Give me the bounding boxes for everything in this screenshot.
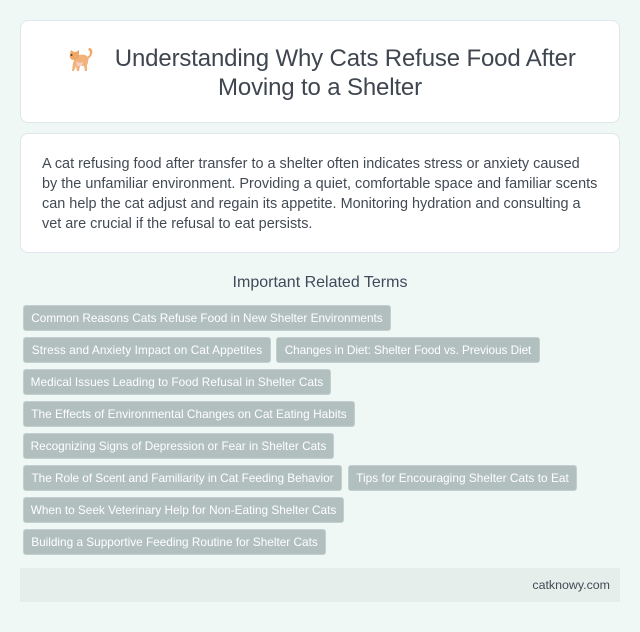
- icon: cat: [70, 48, 92, 71]
- tag: The Effects of Environmental Changes on Cat Eating Habits: [31, 407, 347, 421]
- tag: [23, 401, 355, 427]
- title text: Moving to a Shelter: [218, 74, 422, 101]
- tag: [23, 433, 334, 459]
- tag: When to Seek Veterinary Help for Non-Eating Shelter Cats: [31, 503, 336, 517]
- tag: [23, 529, 326, 555]
- tag: The Role of Scent and Familiarity in Cat Feeding Behavior: [32, 471, 333, 485]
- tag: [23, 465, 342, 491]
- summary text: can help the cat adjust and regain its appetite. Monitoring hydration and consulting a: [42, 196, 581, 212]
- heading: related terms: Important Related Terms: [233, 274, 407, 291]
- tag: Tips for Encouraging Shelter Cats to Eat: [356, 471, 569, 485]
- summary text: vet are crucial if the refusal to eat persists.: [42, 216, 312, 232]
- tag: [23, 305, 391, 331]
- title text: Understanding Why Cats Refuse Food After: [115, 45, 576, 72]
- tag: Changes in Diet: Shelter Food vs. Previous Diet: [285, 343, 531, 357]
- tag: Building a Supportive Feeding Routine for Shelter Cats: [31, 535, 318, 549]
- tag: [348, 465, 577, 491]
- panel: summary: [20, 133, 620, 253]
- tag: Medical Issues Leading to Food Refusal in Shelter Cats: [31, 375, 323, 389]
- tag: Common Reasons Cats Refuse Food in New Shelter Environments: [31, 311, 383, 325]
- title text: [115, 45, 576, 101]
- summary text: A cat refusing food after transfer to a shelter often indicates stress or anxiety caused: [42, 156, 580, 172]
- summary text: by the unfamiliar environment. Providing a quiet, comfortable space and familiar scents: [42, 176, 597, 192]
- panel: title card: [20, 20, 620, 123]
- summary text: [42, 156, 597, 232]
- tag: [23, 337, 271, 363]
- footer text: catknowy.com: [532, 578, 610, 592]
- tag: Recognizing Signs of Depression or Fear in Shelter Cats: [31, 439, 326, 453]
- footer bar: [20, 568, 620, 602]
- tag list: [23, 305, 577, 555]
- tag: [23, 369, 331, 395]
- tag: Stress and Anxiety Impact on Cat Appetites: [32, 343, 262, 357]
- tag: [276, 337, 540, 363]
- tag: [23, 497, 344, 523]
